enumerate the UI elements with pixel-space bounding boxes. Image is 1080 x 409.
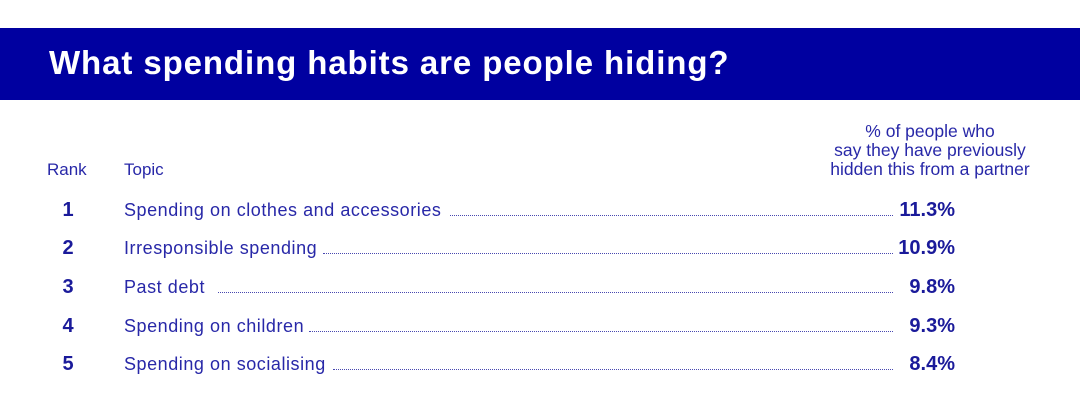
row 4: Spending on children [124, 316, 304, 336]
row 5: 8.4% [909, 353, 955, 375]
row 2: Irresponsible spending [124, 238, 317, 258]
row 2: 2 [62, 237, 74, 259]
header: percentage: hidden this from a partner [830, 159, 1030, 179]
row 2 [62, 237, 955, 259]
header: percentage: say they have previously [834, 140, 1026, 160]
row 3: 3 [62, 276, 74, 298]
row 4 [62, 315, 955, 337]
row 2: 10.9% [898, 237, 955, 259]
row 3: 9.8% [909, 276, 955, 298]
header: topic: Topic [124, 160, 164, 179]
row 1: 1 [62, 199, 74, 221]
row 1: 11.3% [899, 199, 955, 221]
row 3: Past debt [124, 277, 205, 297]
title banner [0, 28, 1080, 100]
header: percentage: % of people who [865, 121, 995, 141]
row 5: Spending on socialising [124, 354, 326, 374]
title: What spending habits are people hiding? [49, 44, 729, 81]
header: percentage [830, 121, 1030, 179]
row 5: 5 [62, 353, 74, 375]
row 1: Spending on clothes and accessories [124, 200, 441, 220]
row 4: 4 [62, 315, 74, 337]
row 5 [62, 353, 955, 375]
row 4: 9.3% [909, 315, 955, 337]
header: rank: Rank [47, 160, 87, 179]
row 3 [62, 276, 955, 298]
row 1 [62, 199, 955, 221]
